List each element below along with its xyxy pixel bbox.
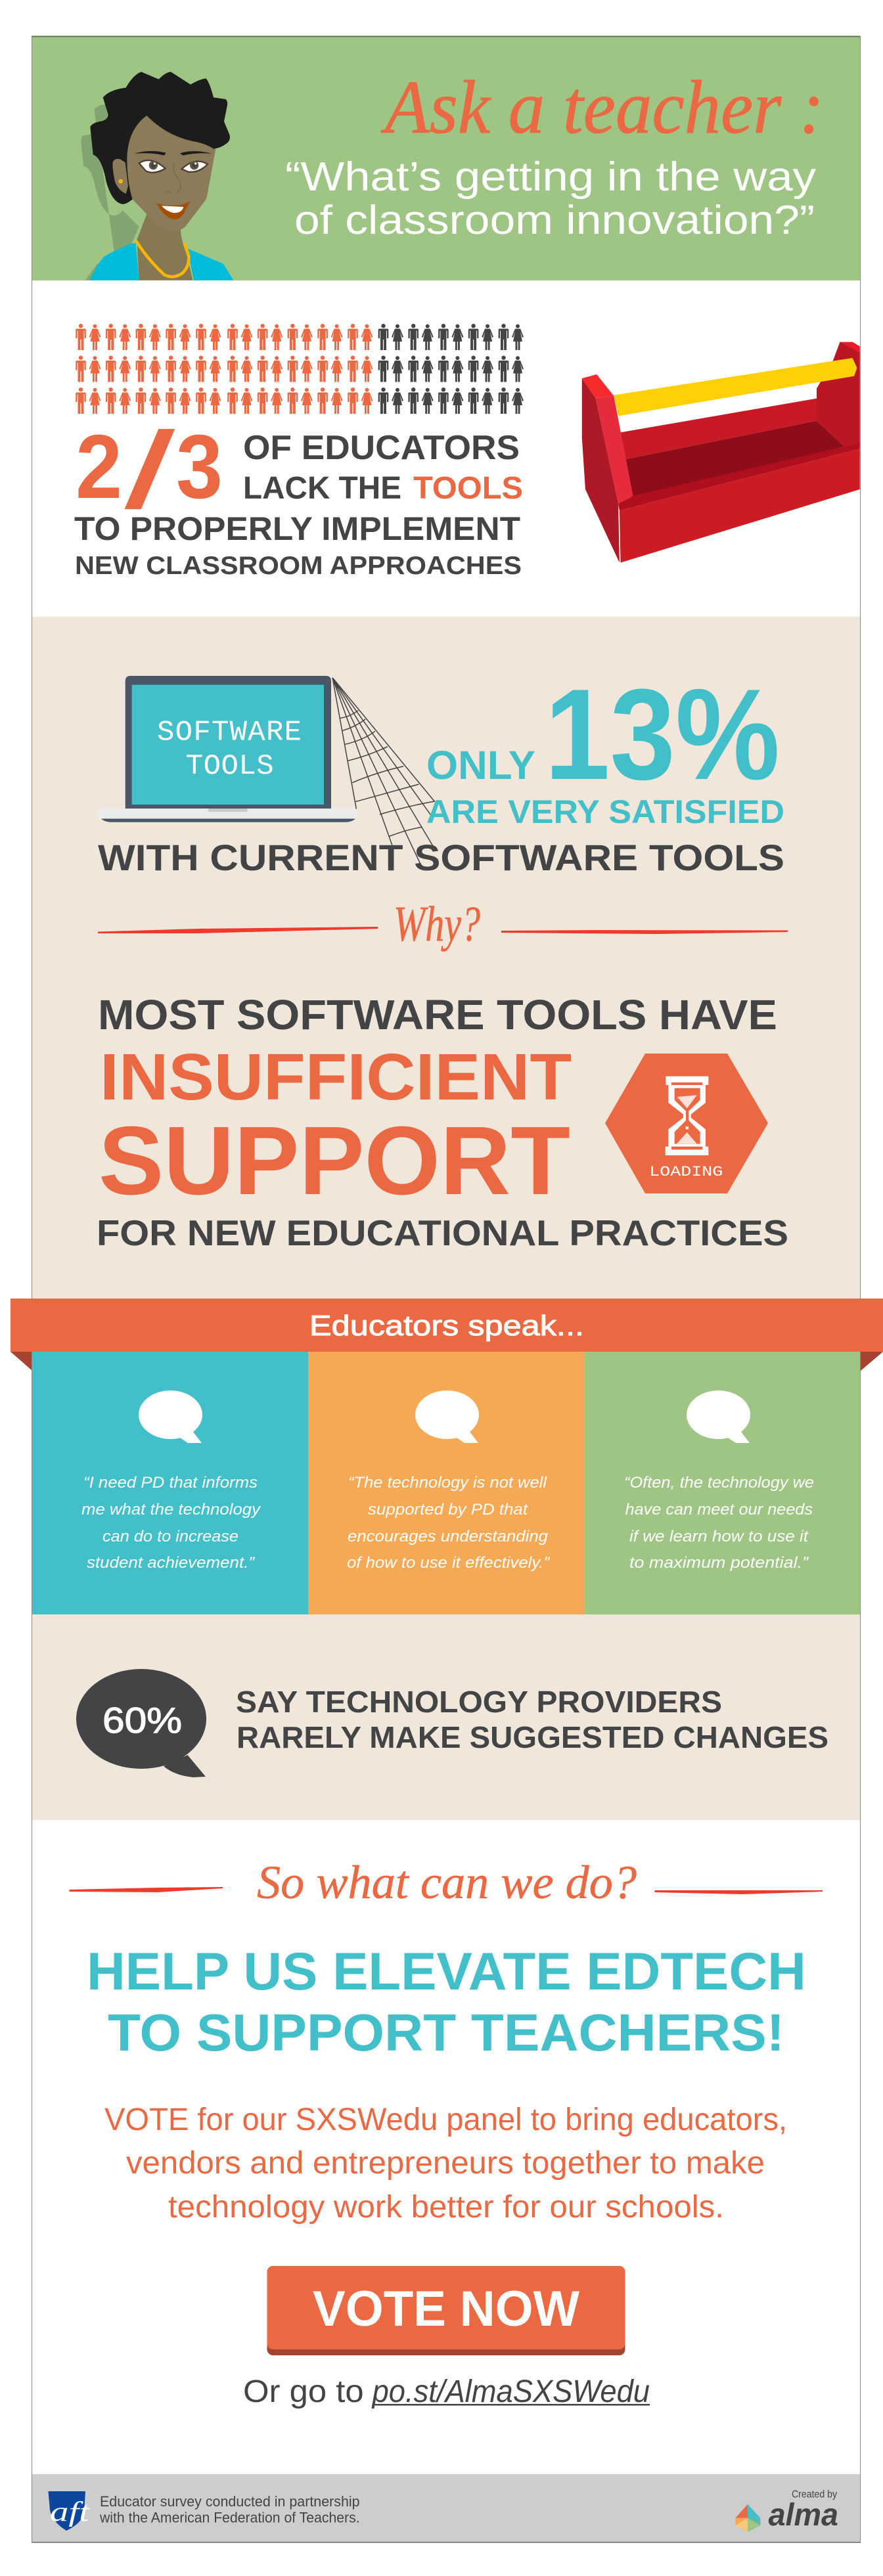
text: lack the tools: TO PROPERLY IMPLEMENT: [74, 510, 520, 547]
panel: software satisfaction: [32, 617, 860, 1299]
heading: elevate edtech: HELP US ELEVATE EDTECH: [87, 1942, 806, 2001]
stat: 13 percent: ONLY: [426, 743, 535, 788]
text: lack the tools: TOOLS: [413, 471, 523, 506]
column: green quote: “Often, the technology we: [624, 1474, 814, 1492]
logo: alma: [735, 2489, 838, 2533]
panel: call to action: [32, 1820, 860, 2474]
text: link: Or go to: [243, 2374, 364, 2409]
icon: laptop with software tools: SOFTWARE: [157, 717, 302, 749]
text: survey note: [99, 2493, 360, 2526]
icon: laptop with software tools: [99, 676, 357, 822]
heading: so what can we do: [70, 1856, 823, 1909]
stat: two thirds: 3: [176, 416, 223, 518]
heading: so what can we do: So what can we do?: [257, 1856, 637, 1909]
heading: why: Why?: [394, 897, 480, 952]
column: orange quote: of how to use it effectively.”: [347, 1554, 550, 1572]
text: providers rarely change: [236, 1685, 828, 1754]
text: lack the tools: [74, 429, 523, 580]
panel: header: [32, 36, 860, 280]
stat: 13 percent: 13%: [545, 662, 780, 807]
stat: two thirds: 2: [76, 416, 122, 518]
panel: footer: [32, 2474, 860, 2543]
panel: tools: [32, 280, 860, 617]
icon: 60 percent bubble: [76, 1669, 206, 1777]
column: orange quote: [308, 1352, 585, 1614]
icon: cobweb: [332, 678, 435, 870]
text: link: [243, 2374, 650, 2409]
column: green quote: have can meet our needs: [625, 1501, 813, 1519]
button: vote now: [267, 2266, 625, 2355]
heading: ask a teacher: Ask a teacher :: [380, 66, 824, 149]
heading: why: [98, 897, 788, 952]
heading: question: of classroom innovation?”: [294, 198, 815, 243]
column: teal quote: student achievement.”: [87, 1554, 255, 1572]
text: insufficient support: MOST SOFTWARE TOOLS HAVE: [98, 991, 777, 1038]
text: vote paragraph: vendors and entrepreneurs together to make: [126, 2146, 765, 2181]
icon: loading hourglass: LOADING: [649, 1164, 723, 1180]
column: teal quote: [32, 1352, 308, 1614]
column: teal quote: can do to increase: [102, 1528, 238, 1545]
stat: 13 percent: [426, 662, 784, 830]
icon: laptop with software tools: TOOLS: [186, 750, 274, 783]
text: lack the tools: NEW CLASSROOM APPROACHES: [75, 552, 522, 580]
stat: two thirds: [76, 410, 223, 530]
button: vote now: VOTE NOW: [313, 2281, 579, 2337]
column: green quote: if we learn how to use it: [629, 1528, 809, 1545]
stat: two thirds: /: [120, 410, 179, 530]
icon: teacher portrait: [81, 72, 233, 280]
pictogram: educators: [76, 324, 524, 414]
heading: question: “What’s getting in the way: [285, 154, 816, 200]
text: link: po.st/AlmaSXSWedu: [371, 2374, 650, 2409]
heading: question: [285, 154, 816, 243]
heading: elevate edtech: TO SUPPORT TEACHERS!: [108, 2003, 784, 2062]
text: insufficient support: FOR NEW EDUCATIONAL PRACTICES: [97, 1212, 788, 1253]
text: lack the tools: OF EDUCATORS: [243, 429, 520, 467]
column: green quote: [585, 1352, 860, 1614]
column: orange quote: “The technology is not well: [348, 1474, 547, 1492]
text: lack the tools: LACK THE: [243, 471, 401, 506]
panel: educators speak quotes: [32, 1352, 860, 1614]
logo: aft shield: [49, 2491, 91, 2531]
column: teal quote: me what the technology: [81, 1501, 261, 1519]
icon: loading hourglass: [605, 1054, 768, 1193]
text: survey note: with the American Federation of Teachers.: [99, 2510, 360, 2526]
heading: elevate edtech: [87, 1942, 806, 2062]
column: green quote: to maximum potential.”: [629, 1554, 809, 1572]
text: insufficient support: INSUFFICIENT: [100, 1040, 572, 1114]
text: vote paragraph: technology work better for our schools.: [168, 2190, 724, 2225]
text: survey note: Educator survey conducted in partnership: [100, 2493, 360, 2510]
logo: alma: alma: [769, 2498, 838, 2533]
stat: 13 percent: ARE VERY SATISFIED: [426, 793, 784, 830]
text: with current software tools: WITH CURRENT SOFTWARE TOOLS: [98, 837, 784, 878]
text: providers rarely change: RARELY MAKE SUGGESTED CHANGES: [237, 1720, 828, 1754]
column: teal quote: “I need PD that informs: [83, 1474, 258, 1492]
text: vote paragraph: [104, 2102, 787, 2225]
column: orange quote: supported by PD that: [368, 1501, 528, 1519]
logo: aft shield: aft: [50, 2497, 91, 2527]
banner: educators speak: [11, 1299, 883, 1371]
icon: toolbox: [582, 342, 860, 563]
logo: alma: Created by: [792, 2489, 837, 2500]
panel: providers: [32, 1614, 860, 1820]
text: insufficient support: SUPPORT: [99, 1107, 570, 1215]
text: providers rarely change: SAY TECHNOLOGY PROVIDERS: [236, 1685, 722, 1719]
text: insufficient support: [97, 991, 788, 1253]
banner: educators speak: Educators speak...: [309, 1310, 584, 1342]
column: orange quote: encourages understanding: [348, 1528, 549, 1545]
icon: 60 percent bubble: 60%: [102, 1700, 182, 1741]
text: vote paragraph: VOTE for our SXSWedu panel to bring educators,: [104, 2102, 787, 2137]
